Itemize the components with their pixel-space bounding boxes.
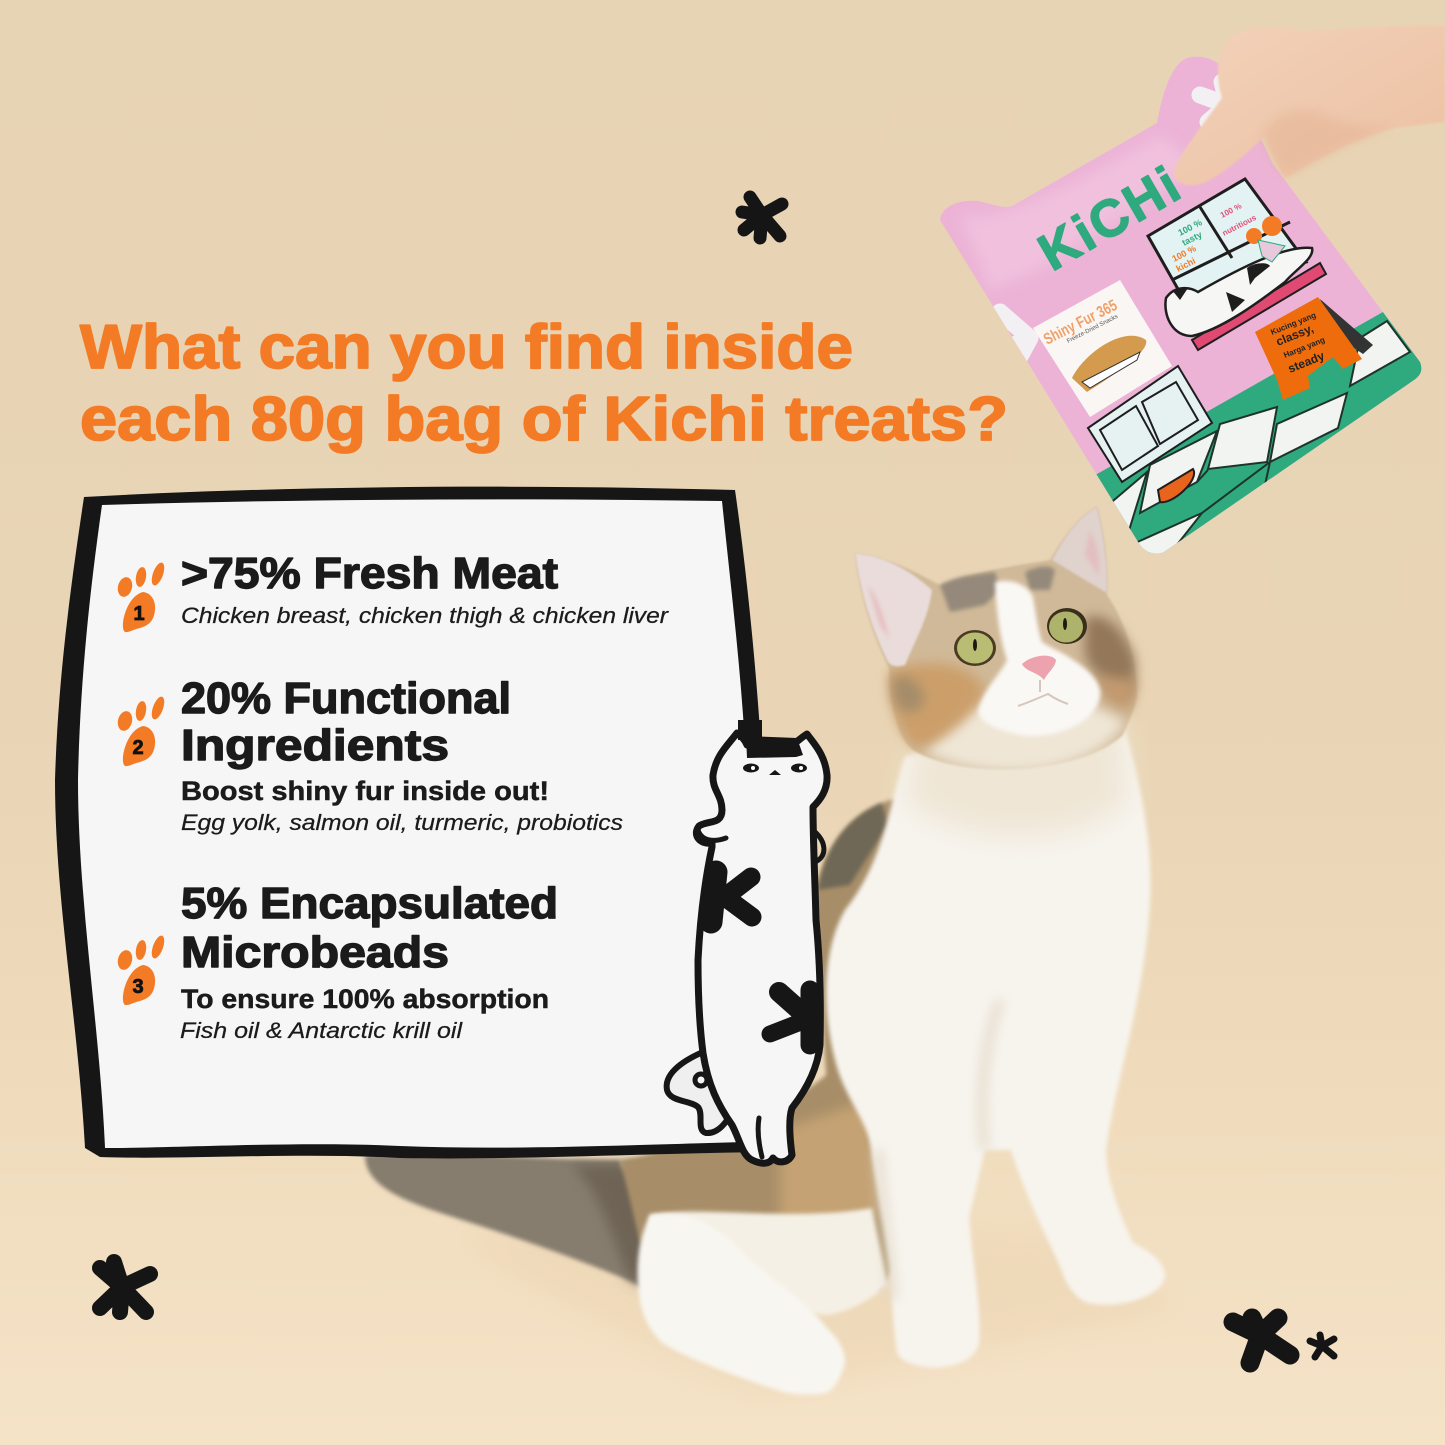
cat floor shadow: [460, 1220, 1180, 1395]
cartoon cat spot top: [711, 872, 752, 922]
panel: ingredients card: [55, 487, 762, 1158]
bag sheen: [968, 140, 1180, 284]
hand: [1174, 26, 1445, 185]
cat cheek colours: [889, 664, 985, 748]
bag window: 100 %: [1219, 201, 1243, 220]
icon: paw 1: [116, 561, 167, 632]
bag window: kichi: [1174, 256, 1197, 274]
cartoon cat body: [696, 733, 827, 1163]
icon: paw 3: 3: [132, 976, 144, 998]
cat eyes: [954, 608, 1087, 666]
heading: microbeads: 5% Encapsulated: [181, 879, 558, 928]
asterisk decoration bottom left: [100, 1262, 150, 1312]
bag body: [940, 57, 1421, 554]
cat forehead markings: [940, 572, 1000, 612]
icon: paw 1: 1: [133, 603, 145, 625]
cat lower face cream: [925, 698, 1125, 772]
bag label: [1033, 280, 1172, 417]
item 2: [116, 674, 623, 835]
heading: microbeads: [181, 879, 558, 977]
item 1: [116, 549, 670, 632]
cat tail: [365, 1154, 650, 1290]
bag artwork: [960, 82, 1430, 570]
title: What can you find inside: [80, 313, 853, 382]
bag label: Shiny Fur 365: [1041, 297, 1120, 349]
heading: fresh meat: >75% Fresh Meat: [181, 549, 558, 598]
cat ears inner: [855, 553, 932, 666]
bag logo: KiCHi: [1029, 156, 1190, 282]
bag shelf: [1192, 263, 1326, 350]
cartoon cat spot bottom: [770, 990, 810, 1045]
description: fish oil: Fish oil & Antarctic krill oil: [180, 1018, 463, 1043]
bag window: [1148, 179, 1306, 298]
panel frame: [55, 487, 762, 1158]
bag orange sign: steady: [1286, 348, 1327, 376]
cat lower belly: [650, 1208, 888, 1315]
illustration: long cartoon cat: [667, 720, 827, 1163]
bag lying cat: [1165, 248, 1312, 336]
subheading: shiny fur: Boost shiny fur inside out!: [181, 776, 549, 806]
bag window: 100 %: [1176, 217, 1204, 238]
heading: microbeads: Microbeads: [181, 928, 449, 977]
asterisk decoration bottom right small: [1310, 1335, 1334, 1357]
cat neck fur: [905, 716, 1128, 838]
cat back body: [620, 800, 1000, 1290]
cartoon cat arm: [698, 830, 824, 1157]
heading: functional ingredients: Ingredients: [181, 721, 449, 770]
heading: functional ingredients: 20% Functional: [181, 674, 511, 723]
icon: paw 3: [116, 934, 167, 1005]
cat nose: [1022, 656, 1056, 680]
bag food bowl: [1158, 469, 1194, 502]
cartoon cat eyes and nose: [743, 764, 807, 775]
bag window: tasty: [1180, 229, 1204, 248]
icon: paw 2: [116, 695, 167, 766]
item 3: [116, 879, 558, 1043]
photo: cat: [365, 507, 1180, 1395]
cartoon cat tail: [667, 1052, 733, 1133]
asterisk decoration bottom right large: [1233, 1318, 1290, 1363]
cartoon cat tail ring: [695, 1074, 707, 1086]
asterisk decoration top: [742, 197, 782, 238]
description: chicken: Chicken breast, chicken thigh & chicken liver: [181, 603, 670, 628]
icon: paw 2: 2: [132, 737, 144, 759]
bag orange sign: Harga yang: [1282, 335, 1326, 360]
subheading: absorption: To ensure 100% absorption: [181, 984, 549, 1014]
title: [80, 313, 1008, 454]
bag flower marks: [998, 82, 1228, 360]
panel top join: [738, 720, 762, 740]
cat head: [855, 507, 1137, 769]
bag label: Freeze-Dried Snacks: [1066, 314, 1119, 345]
photo: hand and treat bag: [940, 26, 1445, 570]
cat white chest and front legs: [826, 720, 1165, 1367]
bag window: nutritious: [1221, 213, 1258, 238]
bag orange sign: [1255, 297, 1373, 400]
panel paper: [78, 499, 745, 1148]
bag floor: [1096, 312, 1422, 554]
bag window: 100 %: [1170, 243, 1198, 264]
cat white blaze and muzzle: [978, 581, 1100, 736]
bag cabinet: [1088, 366, 1212, 482]
heading: functional ingredients: [181, 674, 511, 770]
bag orange sign: classy,: [1274, 321, 1315, 349]
cat hind leg and paw: [638, 1214, 845, 1394]
bag orange sign: Kucing yang: [1269, 310, 1317, 337]
cartoon cat hair fringe: [746, 736, 803, 758]
bag window flowers: [1246, 216, 1285, 262]
title: each 80g bag of Kichi treats?: [80, 385, 1008, 454]
description: egg yolk: Egg yolk, salmon oil, turmeric, probiotics: [181, 810, 623, 835]
bag floor tiles: [1107, 321, 1410, 560]
